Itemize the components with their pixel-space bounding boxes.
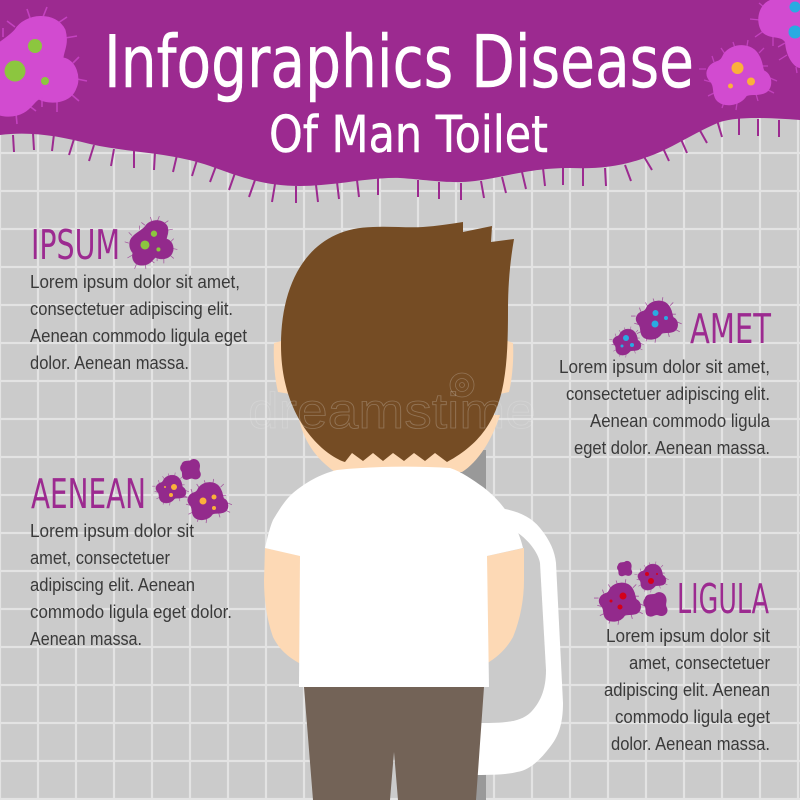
body text: ligula: amet, consectetuer [629, 653, 770, 673]
left arm [264, 548, 302, 665]
body text: ligula: adipiscing elit. Aenean [604, 680, 770, 700]
ears [274, 340, 513, 394]
banner hairs [13, 117, 779, 203]
body text: aenean: Aenean massa. [30, 629, 142, 649]
germ: orange spots [699, 40, 777, 110]
body text: ipsum: dolor. Aenean massa. [30, 353, 189, 373]
face and neck [298, 415, 500, 472]
body text: aenean [30, 521, 232, 649]
panel: ipsum [30, 216, 247, 373]
body text: aenean: adipiscing elit. Aenean [30, 575, 195, 595]
germ: top left green [0, 7, 87, 124]
body text: ipsum [30, 272, 247, 373]
icon: germs blue [609, 297, 682, 357]
heading: aenean: AENEAN [31, 470, 146, 518]
body text: aenean: amet, consectetuer [30, 548, 170, 568]
icon: germs red [594, 561, 669, 625]
body text: amet: Aenean commodo ligula [590, 411, 771, 431]
germ: top right blue [750, 0, 800, 73]
panel: ligula [594, 561, 770, 754]
body text: ipsum: consectetuer adipiscing elit. [30, 299, 233, 319]
panel: amet [559, 297, 772, 458]
title line 2: Of Man Toilet [269, 106, 548, 165]
body text: amet [559, 357, 771, 458]
body text: ipsum: Lorem ipsum dolor sit amet, [30, 272, 240, 292]
watermark: dreamstime [248, 383, 536, 439]
heading: ipsum: IPSUM [31, 221, 120, 269]
icon: germ green [125, 216, 177, 269]
body text: ipsum: Aenean commodo ligula eget [30, 326, 247, 346]
panel: aenean [30, 459, 232, 649]
body text: aenean: Lorem ipsum dolor sit [30, 521, 194, 541]
trousers [304, 687, 484, 800]
header banner [0, 0, 800, 203]
body text: amet: consectetuer adipiscing elit. [566, 384, 770, 404]
body text: aenean: commodo ligula eget dolor. [30, 602, 232, 622]
body text: amet: Lorem ipsum dolor sit amet, [559, 357, 770, 377]
body text: ligula: dolor. Aenean massa. [611, 734, 770, 754]
right arm [486, 548, 524, 664]
body text: amet: eget dolor. Aenean massa. [574, 438, 770, 458]
man seen from behind [264, 222, 524, 800]
urinal [470, 505, 563, 775]
banner shape [0, 0, 800, 186]
t-shirt [265, 467, 523, 687]
hair [281, 222, 514, 462]
urinal pipe [457, 450, 486, 800]
body text: ligula: Lorem ipsum dolor sit [606, 626, 770, 646]
body text: ligula: commodo ligula eget [615, 707, 770, 727]
icon: germs orange [152, 459, 232, 523]
body text: ligula [604, 626, 770, 754]
